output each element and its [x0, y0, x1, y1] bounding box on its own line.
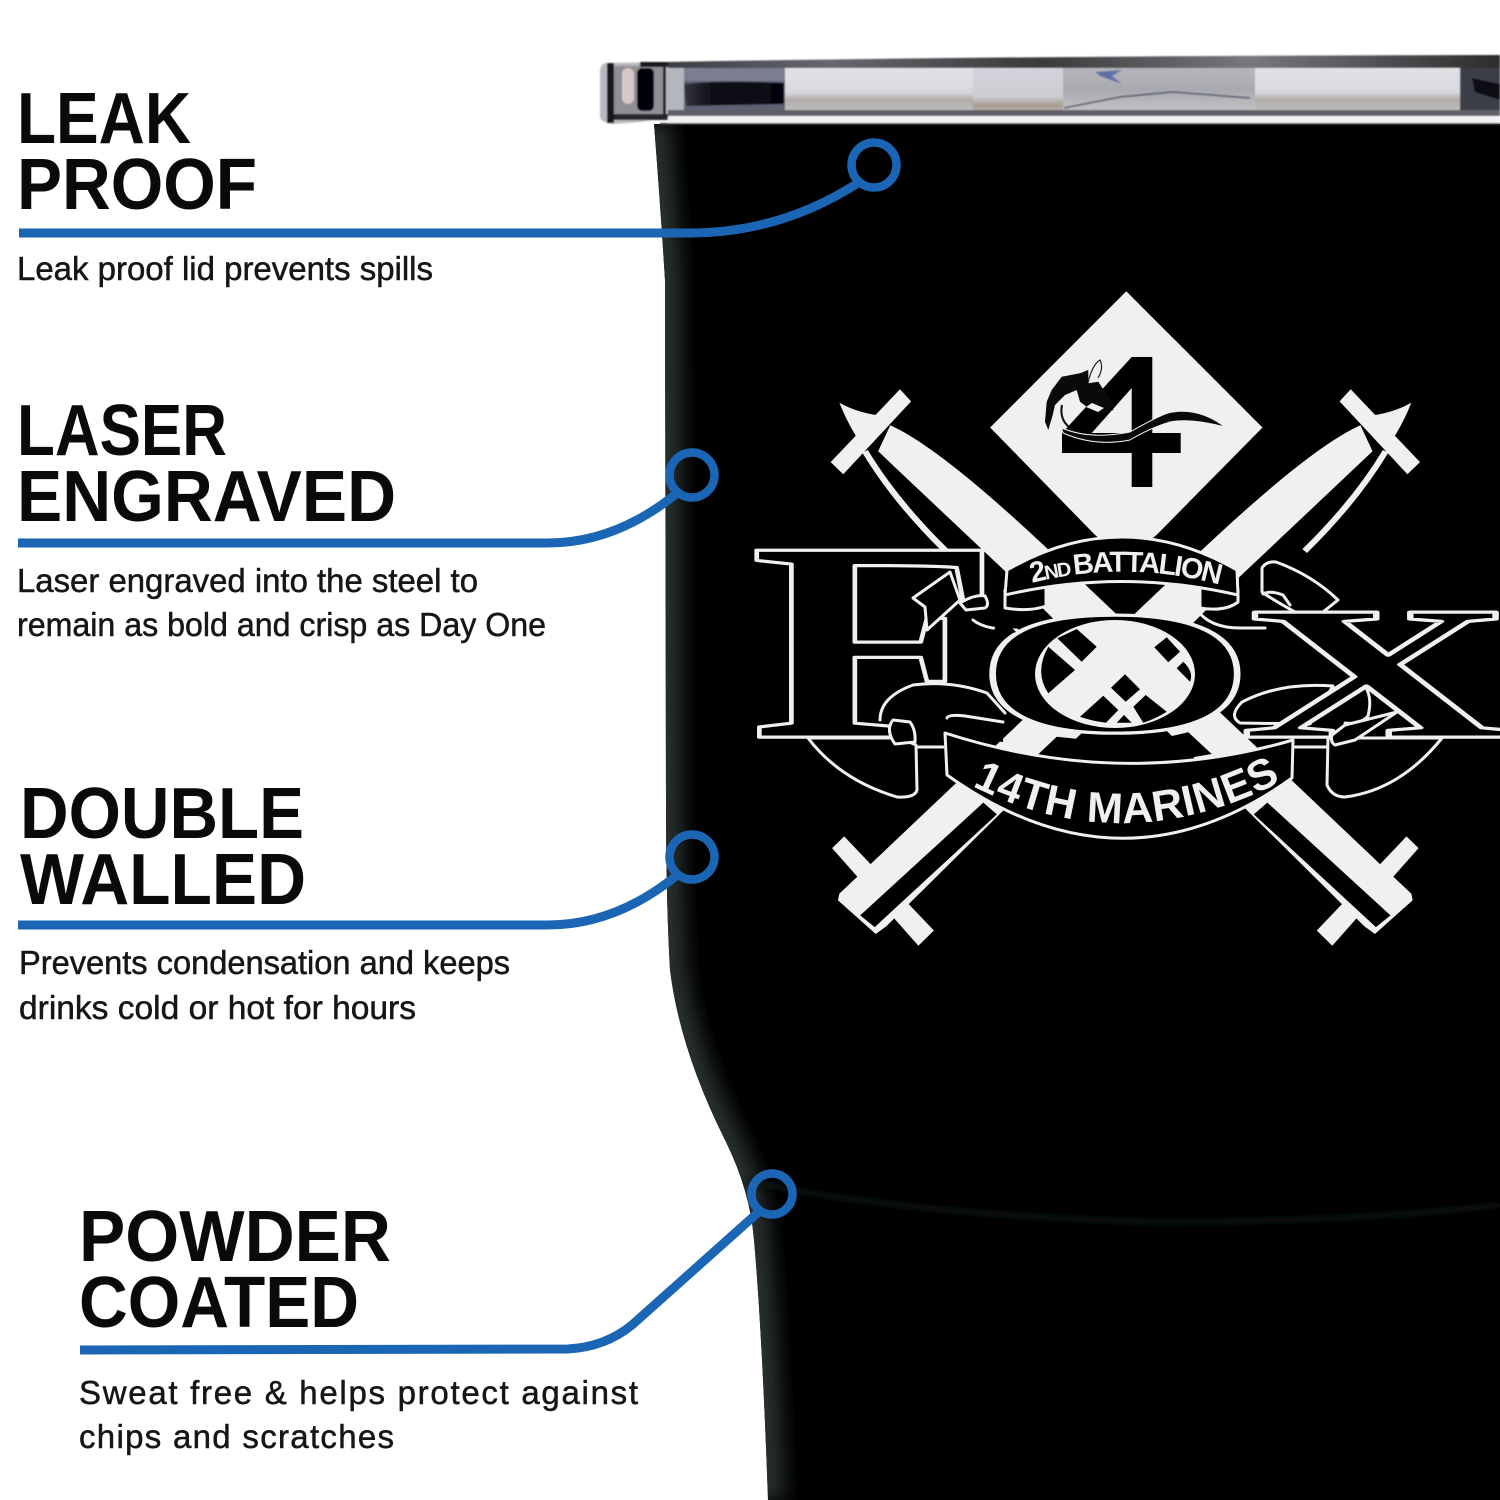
heading: leak proof: LEAK: [17, 79, 191, 159]
emblem: fox: [1045, 360, 1225, 442]
emblem: black gaps below the O: [1037, 732, 1212, 761]
marker: powder coated: [752, 1174, 792, 1214]
emblem: 2nd Battalion banner tails: [1005, 585, 1238, 610]
description: powder coated: chips and scratches: [79, 1418, 394, 1455]
emblem: left-to-right crossed sword: [831, 389, 1419, 946]
description: double walled: Prevents condensation and keeps: [19, 944, 510, 981]
emblem: ribbon tails behind the letters: [808, 562, 1442, 797]
heading: powder coated: [79, 1197, 391, 1343]
heading: double walled: WALLED: [20, 840, 306, 920]
heading: double walled: DOUBLE: [20, 774, 304, 854]
description: laser engraved: [17, 562, 546, 643]
emblem: letter O: O: [975, 576, 1255, 770]
heading: double walled: [20, 774, 306, 920]
description: laser engraved: remain as bold and crisp as Day One: [17, 606, 546, 643]
marker: leak proof: [852, 142, 896, 188]
heading: powder coated: COATED: [79, 1263, 359, 1343]
emblem: [750, 291, 1500, 946]
tumbler body: [654, 124, 1500, 1500]
leader line: double walled: [18, 876, 676, 925]
description: leak proof: Leak proof lid prevents spills: [17, 250, 433, 287]
callout: double walled: [18, 774, 714, 1026]
heading: powder coated: POWDER: [79, 1197, 391, 1277]
emblem: right-to-left crossed sword: [832, 389, 1420, 946]
emblem: numeral 4: [1062, 357, 1181, 487]
emblem: letter F: F: [750, 483, 1002, 799]
callout: laser engraved: [17, 391, 714, 643]
emblem: 14th Marines banner: 14TH MARINES: [974, 758, 1277, 824]
leader line: powder coated: [80, 1209, 762, 1350]
description: powder coated: Sweat free & helps protect against: [79, 1374, 638, 1411]
description: double walled: drinks cold or hot for hours: [19, 989, 416, 1026]
marker: laser engraved: [670, 452, 714, 498]
description: double walled: [19, 944, 510, 1026]
leader line: laser engraved: [18, 494, 676, 543]
heading: laser engraved: LASER: [17, 391, 227, 471]
callout: leak proof: [17, 79, 896, 287]
callout: powder coated: [79, 1174, 792, 1455]
emblem: crossed swords and diamond: [831, 291, 1420, 946]
heading: laser engraved: [17, 391, 396, 537]
emblem: letter X: X: [1240, 567, 1500, 779]
emblem: swords inside the O: [1035, 620, 1195, 728]
heading: leak proof: [17, 79, 257, 225]
emblem: 2nd Battalion banner: 2ND BATTALION: [1030, 552, 1223, 584]
emblem: left ribbon folds: [880, 572, 1016, 744]
marker: double walled: [670, 834, 714, 880]
description: powder coated: [79, 1374, 638, 1455]
heading: laser engraved: ENGRAVED: [17, 457, 396, 537]
emblem: 2nd Battalion banner: [1004, 537, 1240, 596]
emblem: ribbon lines over the X: [1263, 592, 1397, 745]
leader line: leak proof: [19, 183, 858, 233]
description: laser engraved: Laser engraved into the steel to: [17, 562, 478, 599]
emblem: diamond: [990, 291, 1263, 562]
tumbler lid: [600, 55, 1500, 125]
heading: leak proof: PROOF: [17, 145, 257, 225]
